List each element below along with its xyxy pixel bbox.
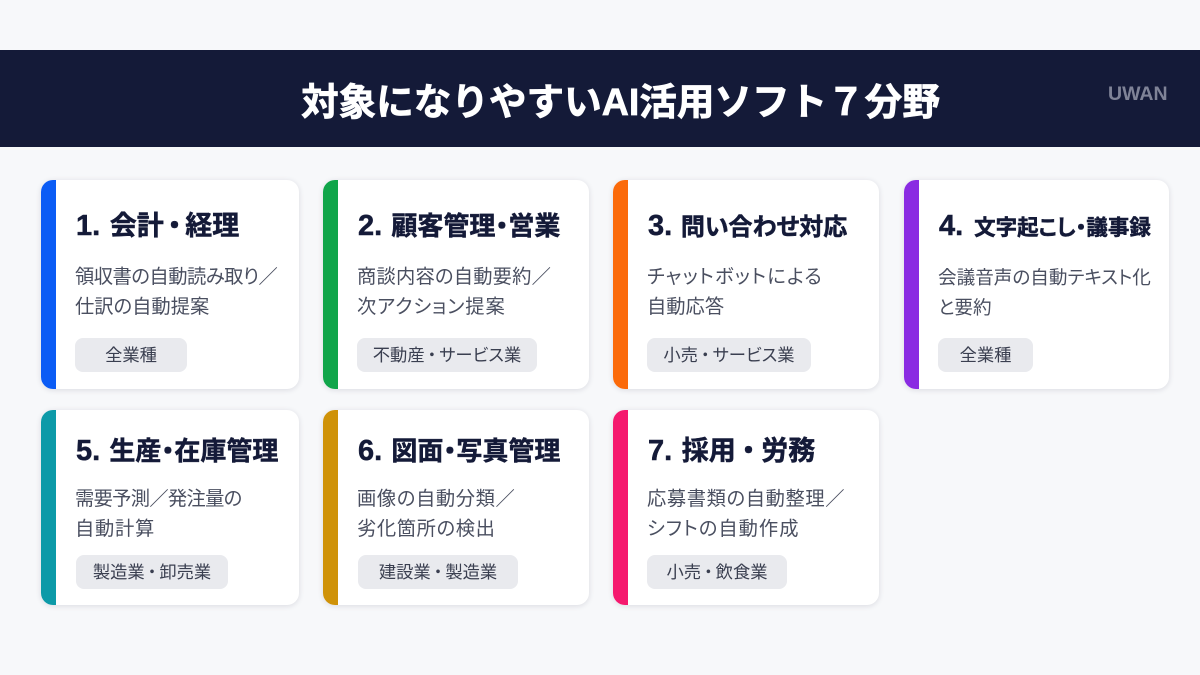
description: 需要予測／発注量の: [75, 489, 242, 510]
description: 劣化箇所の検出: [357, 519, 495, 540]
accent bar: [904, 180, 919, 389]
panel: 1 accounting: [41, 180, 299, 389]
description: [357, 266, 551, 318]
heading: 1.: [76, 210, 100, 242]
industry tag: [75, 338, 187, 372]
heading: 生産・在庫管理: [109, 436, 278, 466]
industry tag: [647, 338, 811, 372]
heading: 顧客管理・営業: [391, 211, 560, 241]
description: 自動計算: [75, 519, 155, 540]
industry tag: 小売・飲食業: [666, 562, 768, 582]
description: 応募書類の自動整理／: [647, 489, 845, 510]
heading: [939, 210, 1151, 242]
description: [647, 267, 823, 318]
title banner: [0, 50, 1200, 147]
description: チャットボットによる: [647, 267, 823, 288]
heading: 問い合わせ対応: [681, 214, 847, 241]
accent bar: [613, 410, 628, 605]
heading: 文字起こし・議事録: [974, 216, 1151, 240]
description: シフトの自動作成: [647, 519, 800, 540]
heading: 会計・経理: [110, 211, 239, 241]
accent bar: [41, 410, 56, 605]
description: [357, 488, 515, 540]
industry tag: [358, 555, 518, 589]
panel: 2 customer management: [323, 180, 589, 389]
panel: 7 recruiting: [613, 410, 879, 605]
description: 商談内容の自動要約／: [357, 267, 551, 288]
panel: 3 inquiries: [613, 180, 879, 389]
industry tag: 小売・サービス業: [663, 345, 795, 365]
industry tag: [647, 555, 787, 589]
description: [938, 267, 1151, 318]
description: [647, 488, 845, 540]
heading: 5.: [76, 435, 100, 467]
heading: 7.: [648, 435, 672, 467]
heading: 3.: [648, 210, 672, 242]
industry tag: 不動産・サービス業: [373, 345, 521, 365]
description: 次アクション提案: [357, 297, 506, 318]
heading: 採用・労務: [682, 436, 815, 466]
description: 自動応答: [647, 297, 724, 318]
accent bar: [323, 180, 338, 389]
heading: 4.: [939, 210, 963, 242]
description: 会議音声の自動テキスト化: [938, 267, 1151, 288]
industry tag: [357, 338, 537, 372]
title: 対象になりやすいAI活用ソフト７分野: [301, 81, 940, 123]
panel: 6 drawings: [323, 410, 589, 605]
description: 画像の自動分類／: [357, 489, 515, 510]
panel: 5 production: [41, 410, 299, 605]
accent bar: [41, 180, 56, 389]
industry tag: 製造業・卸売業: [93, 562, 211, 582]
panel: 4 transcription: [904, 180, 1169, 389]
industry tag: 全業種: [960, 345, 1011, 365]
description: と要約: [938, 297, 992, 318]
industry tag: 全業種: [105, 345, 157, 365]
industry tag: [76, 555, 228, 589]
heading: 6.: [358, 435, 382, 467]
description: [75, 266, 278, 318]
brand label: UWAN: [1108, 83, 1168, 105]
description: [75, 488, 242, 540]
industry tag: [938, 338, 1033, 372]
industry tag: 建設業・製造業: [379, 562, 497, 582]
description: 領収書の自動読み取り／: [75, 267, 277, 288]
heading: 図面・写真管理: [391, 436, 560, 466]
description: 仕訳の自動提案: [75, 297, 209, 318]
accent bar: [613, 180, 628, 389]
accent bar: [323, 410, 338, 605]
heading: 2.: [358, 210, 382, 242]
